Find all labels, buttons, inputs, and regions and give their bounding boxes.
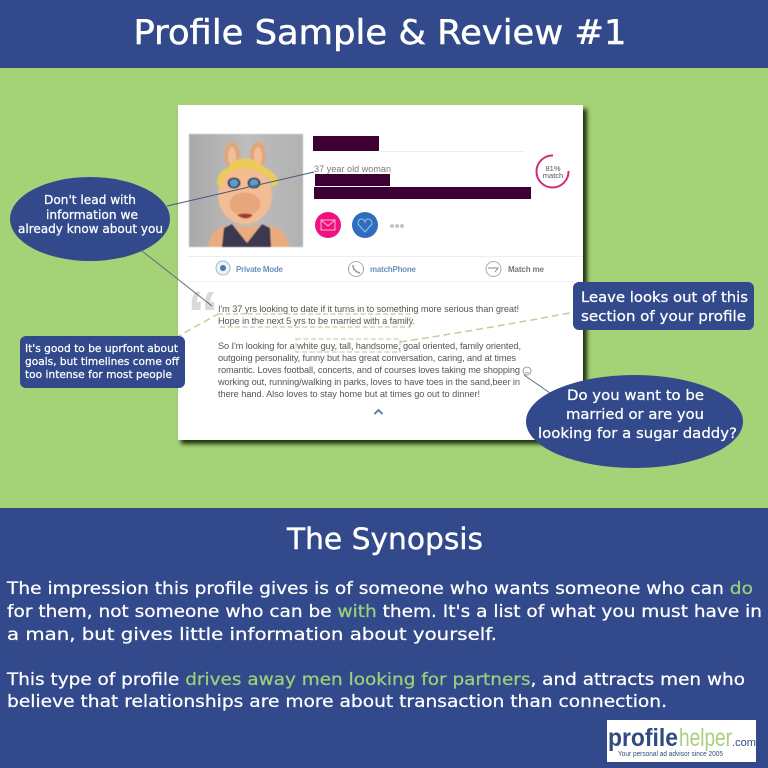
callout: sugar daddy: looking for a sugar daddy? xyxy=(538,426,737,442)
match badge: match xyxy=(543,171,563,180)
arrow: age connector xyxy=(167,172,314,206)
action: matchPhone xyxy=(348,262,417,276)
snout xyxy=(230,192,260,216)
logo: profilehelper: profile xyxy=(608,724,678,752)
profile essay text xyxy=(217,304,521,399)
highlight: timeline box xyxy=(218,314,410,327)
callout: timelines xyxy=(20,336,185,388)
ears xyxy=(224,142,240,168)
logo: profilehelper: helper xyxy=(679,724,732,752)
icon: collapse chevron xyxy=(374,410,382,414)
title: Profile Sample & Review #1 xyxy=(134,13,626,53)
synopsis body text: believe that relationships are more about transaction than connection. xyxy=(7,692,667,712)
callout: timelines: goals, but timelines come off xyxy=(25,355,179,368)
profile essay text: So I'm looking for a white guy, tall, handsome, goal oriented, family oriented, xyxy=(218,341,521,351)
callout: lead information: Don't lead with xyxy=(44,193,136,207)
arrow: looks connector xyxy=(400,312,575,342)
logo: profilehelper xyxy=(607,720,756,762)
synopsis body text xyxy=(6,579,762,712)
action: match me: Match me xyxy=(508,265,545,274)
green review panel xyxy=(0,68,768,508)
callout: lead information xyxy=(10,177,170,261)
icon: smiley xyxy=(523,367,531,375)
panel: synopsis xyxy=(0,508,768,768)
logo: profilehelper: .com xyxy=(732,737,756,749)
callout: lead information: already know about you xyxy=(18,222,163,236)
profile essay text: working out, running/walking in parks, loves to have toes in the sand,beer in xyxy=(217,377,520,387)
callout: timelines: too intense for most people xyxy=(25,368,172,381)
match badge: 81% xyxy=(545,164,561,173)
profile photo: pig puppet xyxy=(189,134,303,247)
callout: sugar daddy xyxy=(526,375,743,468)
icon: message button xyxy=(315,212,341,238)
match badge xyxy=(537,155,569,187)
name redaction xyxy=(313,136,379,151)
face xyxy=(218,166,272,224)
callout: sugar daddy: Do you want to be xyxy=(567,388,704,404)
hair xyxy=(217,158,278,186)
synopsis body text: a man, but gives little information about yourself. xyxy=(7,625,497,645)
logo: profilehelper: Your personal ad advisor since 2005 xyxy=(618,751,723,758)
profile essay text: outgoing personality, funny but has great conversation, caring, and at times xyxy=(218,353,516,363)
profile essay text: Hope in the next 5 yrs to be married with a family. xyxy=(218,316,415,326)
highlight: looks box xyxy=(296,339,400,352)
arrow: smiley connector xyxy=(524,375,550,393)
callout: sugar daddy: married or are you xyxy=(566,407,704,423)
icon: heart button xyxy=(352,212,378,238)
icon: more dots xyxy=(390,224,404,228)
action: match me xyxy=(486,262,545,276)
callout: looks xyxy=(573,282,754,330)
profile essay text: I'm 37 yrs looking to date if it turns in to something more serious than great! xyxy=(218,304,519,314)
synopsis heading: The Synopsis xyxy=(286,522,483,556)
synopsis body text: The impression this profile gives is of someone who wants someone who can do xyxy=(6,579,753,599)
action: private mode: Private Mode xyxy=(236,265,284,274)
callout: looks: section of your profile xyxy=(581,309,746,325)
arrow: quote connector xyxy=(142,251,212,306)
header band xyxy=(0,0,768,68)
synopsis body text: for them, not someone who can be with them. It's a list of what you must have in xyxy=(7,602,762,622)
redaction bars xyxy=(314,174,531,199)
profile essay text: there hand. Also loves to stay home but at times go out to dinner! xyxy=(218,389,480,399)
action: matchPhone: matchPhone xyxy=(370,265,417,274)
icon: quote mark: “ xyxy=(187,278,219,350)
synopsis body text: This type of profile drives away men looking for partners , and attracts men who xyxy=(6,670,745,690)
arms and torso xyxy=(208,226,290,247)
eyes xyxy=(228,178,240,188)
callout: looks: Leave looks out of this xyxy=(581,290,748,306)
mouth xyxy=(237,214,253,218)
panel: profile card xyxy=(178,105,587,444)
callout: lead information: information we xyxy=(46,208,138,222)
callout: timelines: It's good to be uprfont about xyxy=(25,342,179,355)
profile essay text: romantic. Loves football, concerts, and of courses loves taking me shopping xyxy=(218,365,520,375)
arrow: timeline connector xyxy=(175,314,218,338)
age text: 37 year old woman xyxy=(314,164,391,174)
action: private mode xyxy=(216,261,284,275)
